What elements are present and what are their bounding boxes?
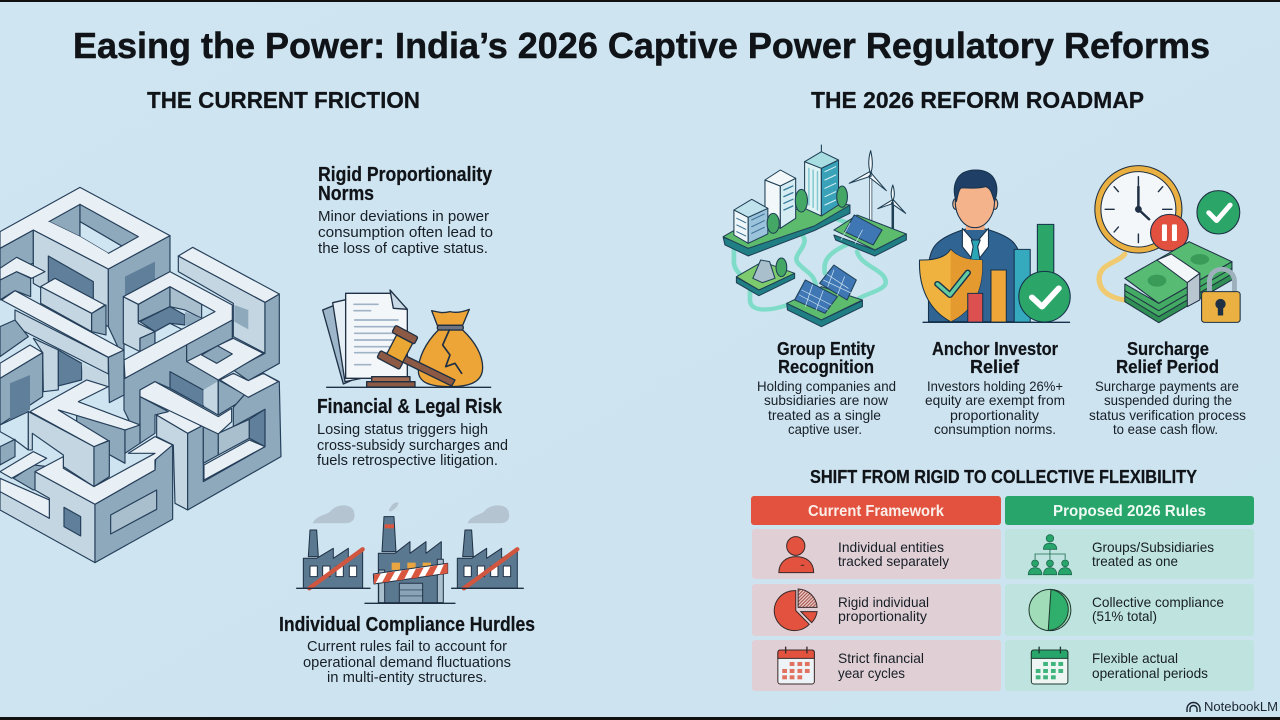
- block: anchor investor relief: [919, 170, 1070, 437]
- icon: clock, pause, money and lock: [1095, 166, 1240, 323]
- block: surcharge relief period: [1089, 166, 1246, 437]
- column: proposed 2026 rules: [1005, 496, 1254, 691]
- body text: Surcharge payments are: [1095, 378, 1239, 394]
- icon: calendar: [778, 647, 814, 684]
- header: current framework: [751, 496, 1001, 525]
- body text: Current rules fail to account for: [307, 638, 507, 655]
- heading: the current friction: THE CURRENT FRICTION: [147, 87, 420, 113]
- icon: connected buildings and renewable sites: [723, 145, 906, 327]
- body text: Holding companies and: [757, 378, 896, 394]
- body text: [317, 421, 508, 469]
- body text: consumption often lead to: [318, 224, 493, 241]
- heading: [932, 338, 1058, 377]
- heading: shift from rigid to collective flexibility: SHIFT FROM RIGID TO COLLECTIVE FLEXIBILITY: [810, 467, 1197, 487]
- body text: cross-subsidy surcharges and: [317, 437, 508, 454]
- title: Easing the Power: India’s 2026 Captive Power Regulatory Reforms: [73, 25, 1210, 66]
- row text: Collective compliance: [1092, 594, 1224, 610]
- row text: Strict financial: [838, 650, 924, 666]
- heading: [318, 164, 493, 205]
- body text: suspended during the: [1104, 392, 1232, 408]
- row text: [838, 650, 924, 681]
- body text: status verification process: [1089, 407, 1246, 423]
- row text: treated as one: [1092, 553, 1178, 569]
- block: financial and legal risk: [317, 290, 508, 469]
- body text: fuels retrospective litigation.: [317, 452, 498, 469]
- heading: Relief Period: [1116, 356, 1219, 377]
- body text: [925, 378, 1065, 437]
- row text: operational periods: [1092, 665, 1208, 681]
- row: operational periods: [1005, 640, 1254, 691]
- row text: year cycles: [838, 665, 905, 681]
- illustration: isometric maze: [0, 187, 281, 563]
- body text: equity are exempt from: [925, 392, 1065, 408]
- icon: pie chart: [774, 589, 817, 631]
- row: groups: [1005, 529, 1254, 579]
- heading: Relief: [970, 356, 1020, 377]
- body text: consumption norms.: [934, 421, 1056, 437]
- row text: Flexible actual: [1092, 650, 1178, 666]
- row text: tracked separately: [838, 553, 949, 569]
- header: current framework: Current Framework: [808, 503, 944, 520]
- body text: subsidiaries are now: [764, 392, 889, 408]
- icon: calendar: [1031, 647, 1068, 684]
- body text: Investors holding 26%+: [927, 378, 1063, 394]
- row: financial year: [752, 640, 1001, 691]
- body text: [1089, 378, 1246, 437]
- row text: [1092, 539, 1214, 569]
- body text: the loss of captive status.: [318, 240, 488, 257]
- body text: Losing status triggers high: [317, 421, 488, 438]
- heading: Rigid Proportionality: [318, 164, 493, 186]
- row: rigid proportionality: [752, 584, 1001, 636]
- heading: Surcharge: [1127, 338, 1209, 359]
- comparison table: [751, 496, 1254, 691]
- body text: proportionality: [950, 407, 1039, 423]
- heading: Recognition: [778, 356, 874, 377]
- heading: Individual Compliance Hurdles: [279, 614, 535, 636]
- row text: [1092, 594, 1224, 624]
- heading: the 2026 reform roadmap: THE 2026 REFORM ROADMAP: [811, 87, 1144, 113]
- row text: [838, 539, 949, 569]
- block: individual compliance hurdles: [279, 502, 535, 686]
- block: group entity recognition: [723, 145, 906, 437]
- body text: [318, 208, 493, 257]
- icon: person: [779, 537, 814, 573]
- row text: Individual entities: [838, 539, 944, 555]
- header: proposed 2026 rules: [1005, 496, 1254, 525]
- icon: blocked factories: [297, 502, 523, 603]
- watermark: NotebookLM: NotebookLM: [1204, 699, 1278, 714]
- icon: documents, gavel, money bag: [323, 290, 491, 387]
- row text: Rigid individual: [838, 594, 929, 610]
- body text: in multi-entity structures.: [327, 669, 487, 686]
- row text: [838, 594, 929, 624]
- icon: org chart: [1028, 535, 1072, 575]
- heading: [1116, 338, 1219, 377]
- row text: (51% total): [1092, 608, 1157, 624]
- row text: [1092, 650, 1208, 681]
- row text: Groups/Subsidiaries: [1092, 539, 1214, 555]
- heading: Anchor Investor: [932, 338, 1058, 359]
- panel: the current friction: [0, 87, 535, 686]
- block: rigid proportionality norms: [318, 164, 493, 257]
- heading: [777, 338, 876, 377]
- column: current framework: [751, 496, 1001, 691]
- body text: treated as a single: [768, 407, 881, 423]
- body text: operational demand fluctuations: [303, 654, 511, 671]
- body text: captive user.: [788, 421, 862, 437]
- icon: investor with shield and bars: [919, 170, 1070, 322]
- body text: Minor deviations in power: [318, 208, 489, 225]
- body text: to ease cash flow.: [1113, 421, 1218, 437]
- body text: [303, 638, 511, 686]
- icon: split circle: [1029, 589, 1071, 631]
- panel: the 2026 reform roadmap: [723, 87, 1254, 691]
- row: collective compliance: [1005, 584, 1254, 636]
- heading: Financial & Legal Risk: [317, 396, 503, 418]
- row text: proportionality: [838, 608, 927, 624]
- row: individual entities: [752, 529, 1001, 579]
- heading: Norms: [318, 183, 374, 205]
- body text: [757, 378, 896, 437]
- heading: Group Entity: [777, 338, 876, 359]
- header: proposed 2026 rules: Proposed 2026 Rules: [1053, 503, 1206, 520]
